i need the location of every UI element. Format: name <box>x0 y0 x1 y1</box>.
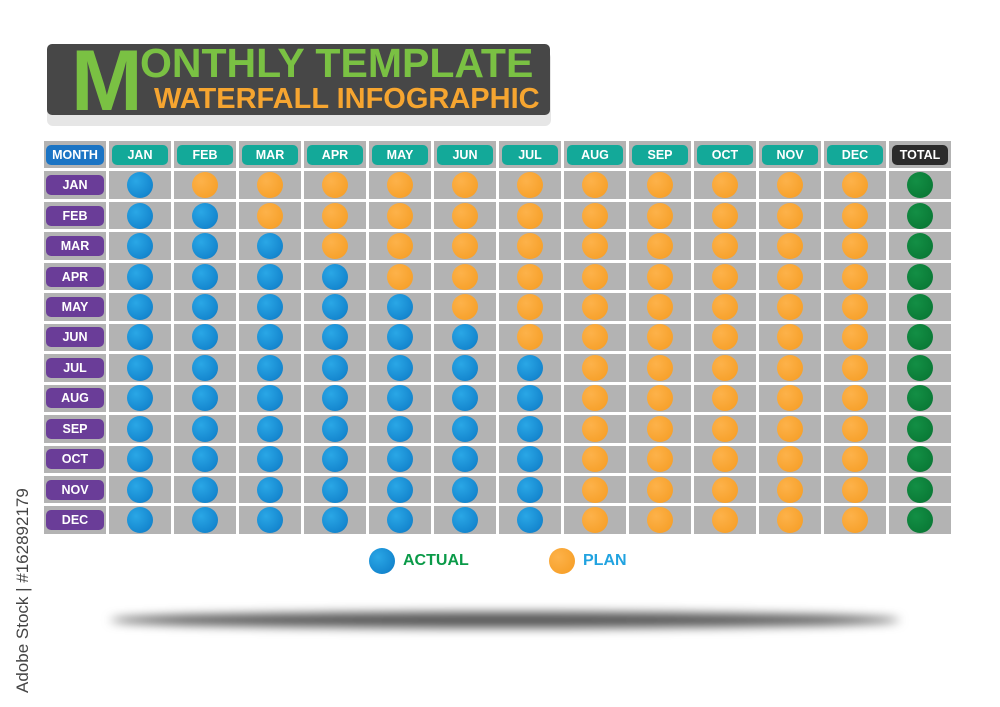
table grid: MAY <box>62 300 88 314</box>
table grid: NOV <box>776 148 804 162</box>
table grid: FEB <box>192 148 218 162</box>
title line 1: ONTHLY TEMPLATE <box>140 40 533 86</box>
table grid: JAN <box>127 148 152 162</box>
table grid: OCT <box>712 148 738 162</box>
table grid: MONTH <box>52 148 98 162</box>
table grid: TOTAL <box>900 148 940 162</box>
table grid: SEP <box>647 148 672 162</box>
table grid: AUG <box>61 391 89 405</box>
legend: plan: PLAN <box>583 552 627 569</box>
table grid: APR <box>322 148 348 162</box>
watermark credit vertical: Adobe Stock | #162892179 <box>13 488 32 693</box>
table grid: MAR <box>61 239 89 253</box>
table grid: JUL <box>63 361 87 375</box>
title banner <box>47 33 551 129</box>
legend <box>369 548 627 574</box>
big M: M <box>71 33 143 129</box>
table grid: AUG <box>581 148 609 162</box>
table grid: DEC <box>62 513 88 527</box>
table grid: FEB <box>62 209 88 223</box>
table grid: MAY <box>387 148 413 162</box>
legend: plan <box>549 548 627 574</box>
floor shadow <box>110 612 900 628</box>
table grid: JUL <box>518 148 542 162</box>
title line 2: WATERFALL INFOGRAPHIC <box>154 83 540 115</box>
table grid <box>44 141 954 534</box>
legend: actual <box>369 548 469 574</box>
legend: actual: ACTUAL <box>403 552 469 569</box>
table grid: MAR <box>256 148 284 162</box>
table grid: APR <box>62 270 88 284</box>
table grid: JAN <box>62 178 88 192</box>
table grid: JUN <box>62 330 88 344</box>
table grid: JUN <box>452 148 478 162</box>
table grid: NOV <box>61 483 89 497</box>
table grid: OCT <box>62 452 88 466</box>
table grid: DEC <box>842 148 868 162</box>
table grid: SEP <box>62 422 88 436</box>
